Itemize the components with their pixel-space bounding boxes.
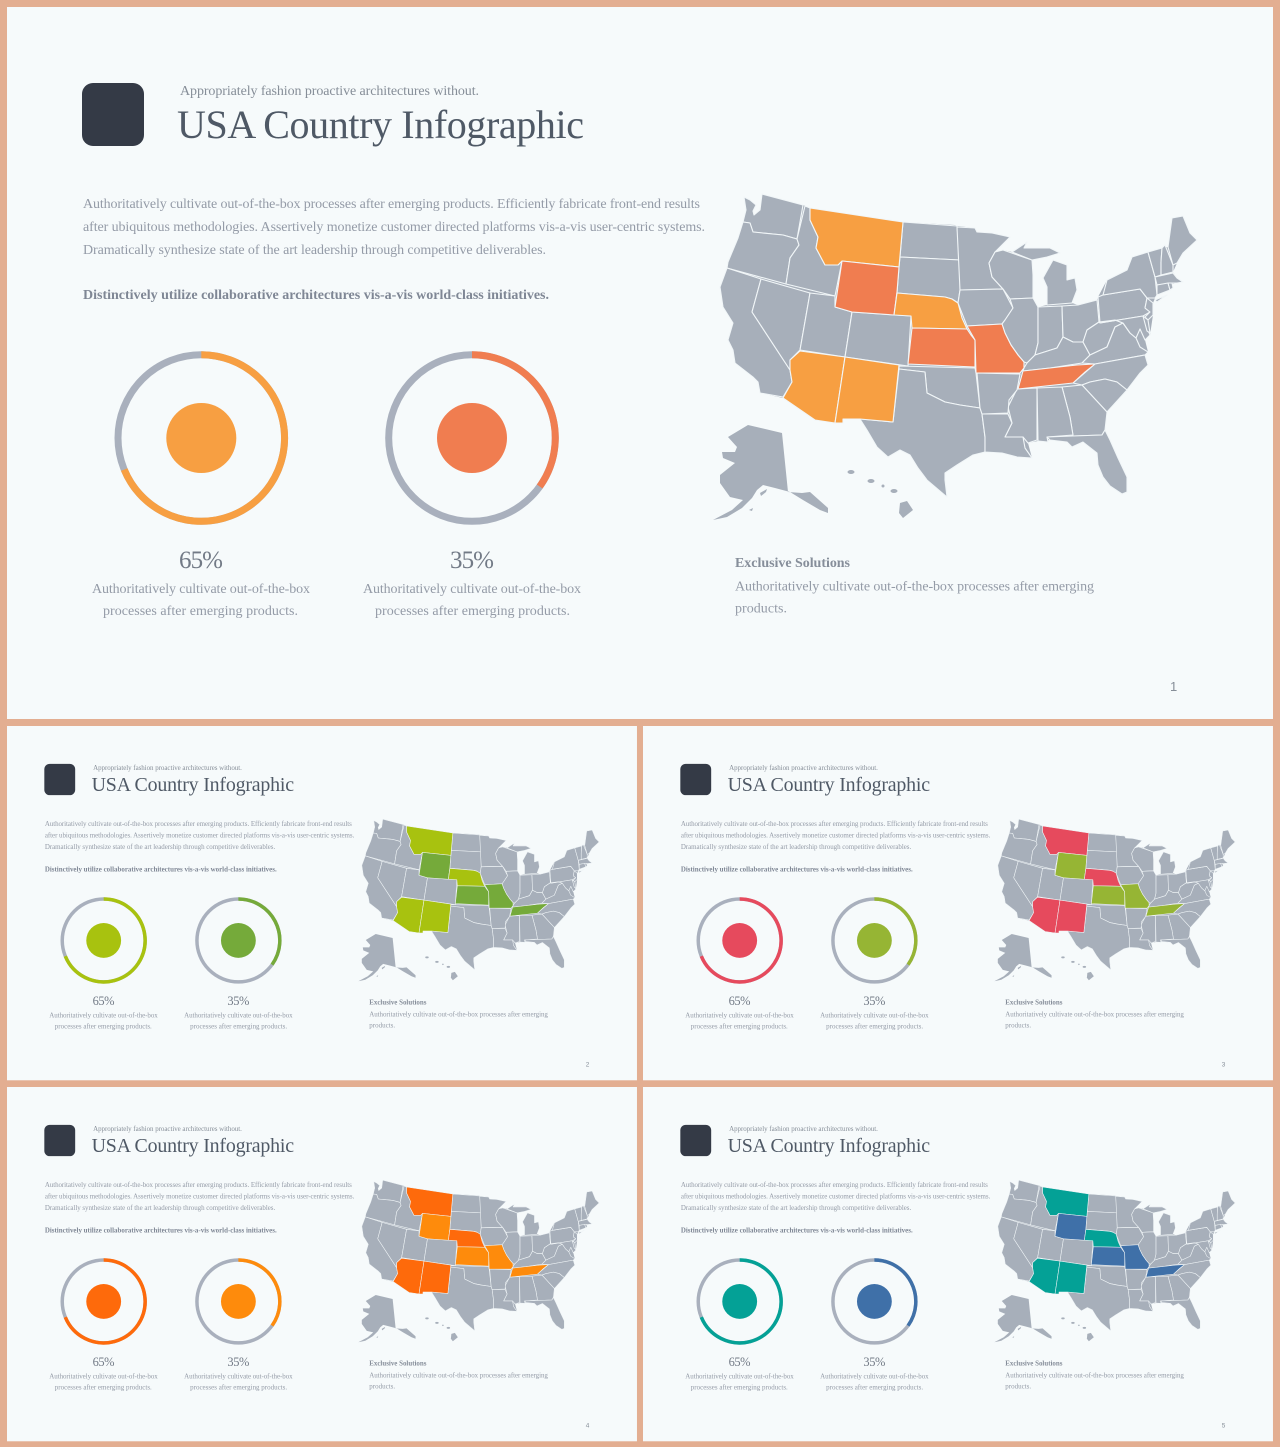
solutions text block: Exclusive Solutions	[1005, 1360, 1063, 1368]
bold statement: Distinctively utilize collaborative architectures vis-a-vis world-class initiatives.	[45, 865, 277, 873]
donut chart 35%	[197, 899, 280, 982]
caption 65%	[92, 582, 310, 619]
caption 35%: processes after emerging products.	[190, 1023, 287, 1031]
intro paragraph: after ubiquitous methodologies. Assertively monetize customer directed platforms vis-a-vis user-centric systems.	[681, 1192, 991, 1200]
caption 65%: processes after emerging products.	[691, 1023, 788, 1031]
subtitle: Appropriately fashion proactive architectures without.	[93, 1125, 242, 1133]
solutions text block: Authoritatively cultivate out-of-the-box processes after emerging	[1005, 1010, 1184, 1018]
intro paragraph: Dramatically synthesize state of the art leadership through competitive deliverables.	[681, 1204, 911, 1212]
intro paragraph	[45, 1181, 355, 1212]
logo square	[82, 83, 144, 146]
caption 65%: Authoritatively cultivate out-of-the-box	[49, 1012, 158, 1020]
Kansas	[908, 328, 975, 367]
slide 3: red and green slide	[643, 726, 1273, 1080]
Tennessee	[1018, 364, 1095, 389]
caption 35%: Authoritatively cultivate out-of-the-box	[184, 1012, 293, 1020]
bold statement: Distinctively utilize collaborative architectures vis-a-vis world-class initiatives.	[681, 865, 913, 873]
donut chart 65%	[62, 1260, 145, 1343]
intro paragraph	[681, 820, 991, 851]
value 65%: 65%	[729, 994, 750, 1008]
donut chart 65%	[698, 899, 781, 982]
New Mexico	[835, 357, 899, 423]
solutions text block: products.	[735, 602, 787, 616]
subtitle: Appropriately fashion proactive architectures without.	[93, 764, 242, 772]
value 35%: 35%	[863, 994, 885, 1008]
Wyoming	[835, 261, 899, 315]
caption 35%: processes after emerging products.	[826, 1023, 923, 1031]
solutions text block: Authoritatively cultivate out-of-the-box processes after emerging	[369, 1371, 548, 1379]
value 35%: 35%	[227, 994, 249, 1008]
USA map	[994, 1180, 1235, 1342]
value 65%: 65%	[93, 1355, 114, 1369]
caption 35%: Authoritatively cultivate out-of-the-box	[363, 582, 581, 597]
value 65%: 65%	[179, 547, 223, 574]
Arizona	[783, 351, 845, 423]
caption 65%: Authoritatively cultivate out-of-the-box	[49, 1373, 158, 1381]
grey states	[713, 194, 1197, 520]
solutions text block: Exclusive Solutions	[369, 999, 427, 1007]
solutions text block: products.	[1005, 1021, 1031, 1029]
solutions text block	[1005, 999, 1184, 1029]
caption 65%: Authoritatively cultivate out-of-the-box	[92, 582, 310, 597]
slide 5: teal and blue slide	[643, 1087, 1273, 1441]
page number: 3	[1222, 1061, 1226, 1068]
bold statement: Distinctively utilize collaborative architectures vis-a-vis world-class initiatives.	[45, 1226, 277, 1234]
caption 65%	[685, 1373, 794, 1392]
intro paragraph: after ubiquitous methodologies. Assertively monetize customer directed platforms vis-a-vis user-centric systems.	[45, 831, 355, 839]
logo square	[44, 764, 75, 795]
caption 35%: Authoritatively cultivate out-of-the-box	[820, 1373, 929, 1381]
intro paragraph: Dramatically synthesize state of the art leadership through competitive deliverables.	[45, 1204, 275, 1212]
logo square	[680, 1125, 711, 1156]
caption 35%: processes after emerging products.	[826, 1384, 923, 1392]
value 65%: 65%	[93, 994, 114, 1008]
Montana	[810, 208, 903, 267]
logo square	[680, 764, 711, 795]
solutions text block	[735, 556, 1094, 616]
title: USA Country Infographic	[728, 1135, 930, 1157]
page number: 4	[586, 1422, 590, 1429]
caption 65%: processes after emerging products.	[55, 1023, 152, 1031]
solutions text block	[1005, 1360, 1184, 1390]
caption 35%	[184, 1012, 293, 1031]
page number: 1	[1170, 679, 1177, 694]
solutions text block: Authoritatively cultivate out-of-the-box processes after emerging	[735, 580, 1094, 594]
caption 35%	[820, 1012, 929, 1031]
solutions text block: products.	[369, 1021, 395, 1029]
donut chart 35%	[389, 355, 555, 521]
USA map	[358, 1180, 599, 1342]
value 35%: 35%	[227, 1355, 249, 1369]
Alaska and Hawaii	[713, 425, 913, 520]
solutions text block: Exclusive Solutions	[735, 556, 851, 571]
Nebraska	[894, 293, 967, 329]
caption 35%: Authoritatively cultivate out-of-the-box	[820, 1012, 929, 1020]
solutions text block	[369, 999, 548, 1029]
caption 35%: processes after emerging products.	[190, 1384, 287, 1392]
panel background 3	[643, 726, 1273, 1080]
USA map	[358, 819, 599, 981]
value 35%: 35%	[450, 547, 494, 574]
donut chart 35%	[833, 1260, 916, 1343]
caption 35%	[184, 1373, 293, 1392]
page number: 5	[1222, 1422, 1226, 1429]
intro paragraph	[45, 820, 355, 851]
bold statement: Distinctively utilize collaborative architectures vis-a-vis world-class initiatives.	[83, 288, 549, 303]
caption 65%: Authoritatively cultivate out-of-the-box	[685, 1012, 794, 1020]
donut chart 65%	[62, 899, 145, 982]
solutions text block: Authoritatively cultivate out-of-the-box processes after emerging	[1005, 1371, 1184, 1379]
page number: 2	[586, 1061, 590, 1068]
intro paragraph: after ubiquitous methodologies. Assertively monetize customer directed platforms vis-a-vis user-centric systems.	[45, 1192, 355, 1200]
intro paragraph: Authoritatively cultivate out-of-the-box processes after emerging products. Efficiently fabricate front-end results	[45, 820, 352, 828]
caption 65%: processes after emerging products.	[103, 604, 298, 619]
caption 65%: processes after emerging products.	[55, 1384, 152, 1392]
caption 65%: processes after emerging products.	[691, 1384, 788, 1392]
intro paragraph	[681, 1181, 991, 1212]
caption 35%: processes after emerging products.	[375, 604, 570, 619]
intro paragraph: Authoritatively cultivate out-of-the-box processes after emerging products. Efficiently fabricate front-end results	[681, 1181, 988, 1189]
intro paragraph: Dramatically synthesize state of the art leadership through competitive deliverables.	[83, 243, 546, 258]
panel background 4	[7, 1087, 637, 1441]
intro paragraph	[83, 197, 705, 258]
intro paragraph: Dramatically synthesize state of the art leadership through competitive deliverables.	[681, 843, 911, 851]
USA map	[994, 819, 1235, 981]
panel background 2	[7, 726, 637, 1080]
panel background 1	[7, 7, 1273, 719]
slide 2: green slide	[7, 726, 637, 1080]
caption 65%	[685, 1012, 794, 1031]
caption 35%	[363, 582, 581, 619]
USA map	[713, 194, 1197, 520]
panel background 5	[643, 1087, 1273, 1441]
title: USA Country Infographic	[92, 774, 294, 796]
intro paragraph: after ubiquitous methodologies. Assertively monetize customer directed platforms vis-a-vis user-centric systems.	[83, 220, 705, 235]
caption 35%	[820, 1373, 929, 1392]
donut chart 65%	[118, 355, 285, 521]
title: USA Country Infographic	[177, 102, 584, 147]
logo square	[44, 1125, 75, 1156]
subtitle: Appropriately fashion proactive architectures without.	[729, 1125, 878, 1133]
donut chart 35%	[197, 1260, 280, 1343]
intro paragraph: Authoritatively cultivate out-of-the-box processes after emerging products. Efficiently fabricate front-end results	[45, 1181, 352, 1189]
value 35%: 35%	[863, 1355, 885, 1369]
caption 65%	[49, 1012, 158, 1031]
intro paragraph: Dramatically synthesize state of the art leadership through competitive deliverables.	[45, 843, 275, 851]
solutions text block: products.	[369, 1382, 395, 1390]
caption 65%	[49, 1373, 158, 1392]
solutions text block: products.	[1005, 1382, 1031, 1390]
bold statement: Distinctively utilize collaborative architectures vis-a-vis world-class initiatives.	[681, 1226, 913, 1234]
title: USA Country Infographic	[92, 1135, 294, 1157]
slide 1: large orange slide	[7, 7, 1273, 719]
solutions text block: Authoritatively cultivate out-of-the-box processes after emerging	[369, 1010, 548, 1018]
caption 35%: Authoritatively cultivate out-of-the-box	[184, 1373, 293, 1381]
subtitle: Appropriately fashion proactive architectures without.	[180, 84, 479, 99]
solutions text block: Exclusive Solutions	[1005, 999, 1063, 1007]
solutions text block: Exclusive Solutions	[369, 1360, 427, 1368]
value 65%: 65%	[729, 1355, 750, 1369]
Missouri	[967, 324, 1024, 373]
intro paragraph: Authoritatively cultivate out-of-the-box processes after emerging products. Efficiently fabricate front-end results	[681, 820, 988, 828]
slide 4: bright orange slide	[7, 1087, 637, 1441]
donut chart 35%	[833, 899, 916, 982]
donut chart 65%	[698, 1260, 781, 1343]
subtitle: Appropriately fashion proactive architectures without.	[729, 764, 878, 772]
solutions text block	[369, 1360, 548, 1390]
intro paragraph: after ubiquitous methodologies. Assertively monetize customer directed platforms vis-a-vis user-centric systems.	[681, 831, 991, 839]
title: USA Country Infographic	[728, 774, 930, 796]
intro paragraph: Authoritatively cultivate out-of-the-box processes after emerging products. Efficiently fabricate front-end results	[83, 197, 700, 212]
caption 65%: Authoritatively cultivate out-of-the-box	[685, 1373, 794, 1381]
